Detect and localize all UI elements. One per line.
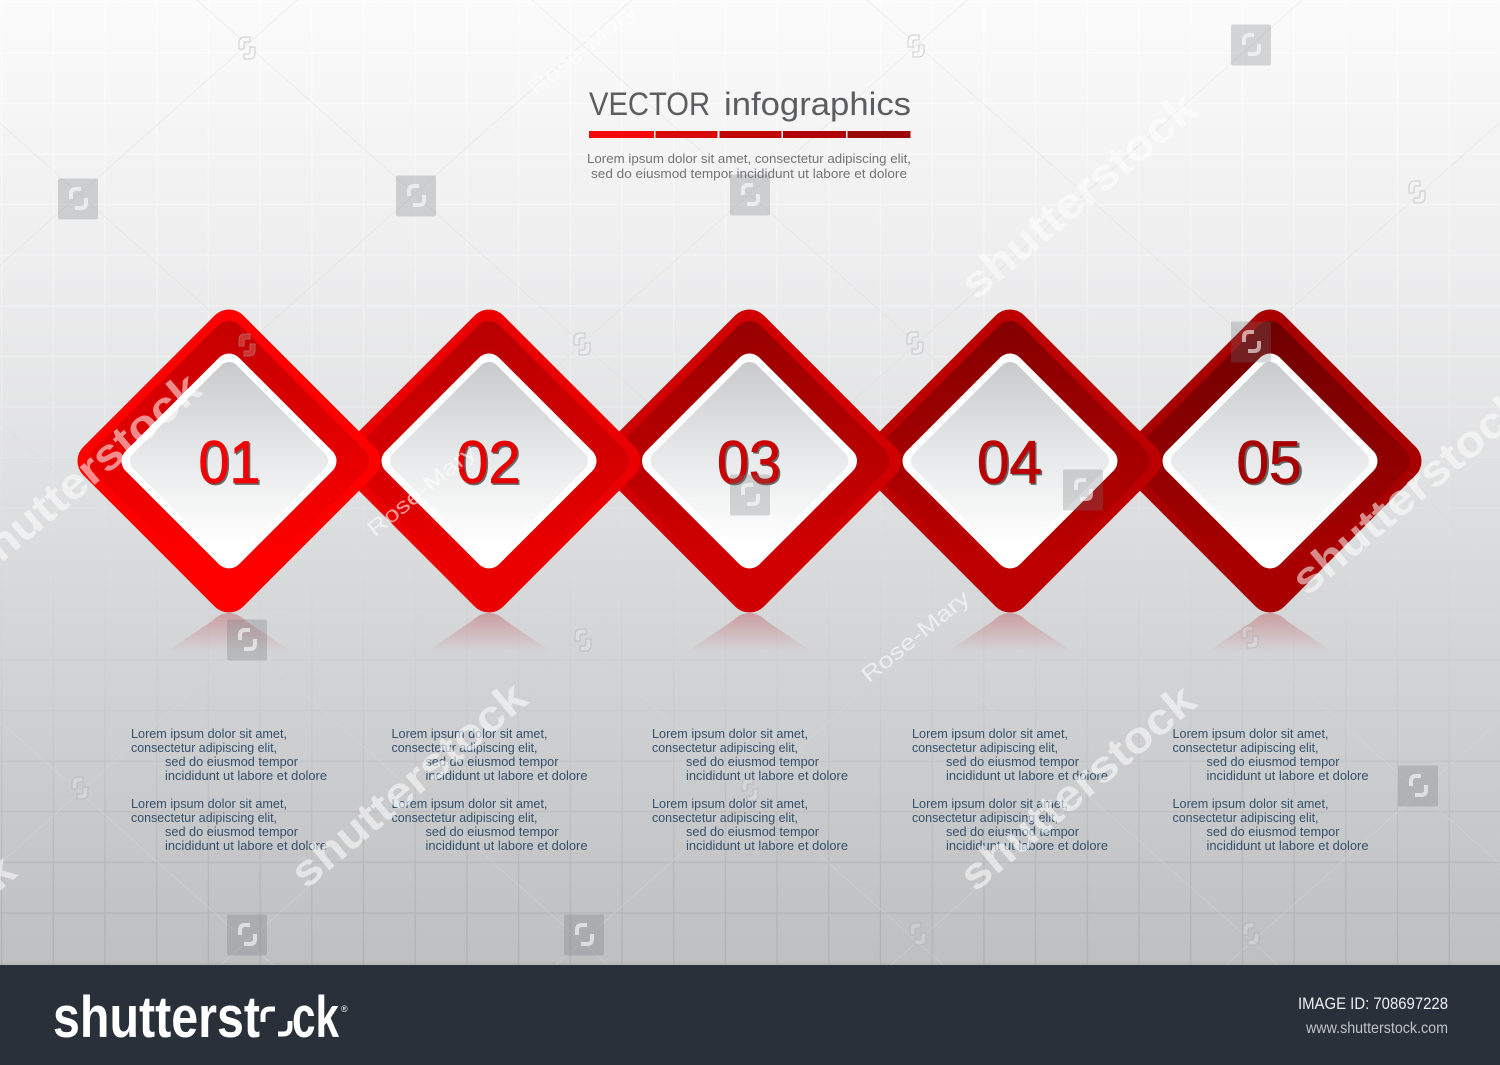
text block: step 05 (1172, 727, 1369, 853)
subtitle (587, 152, 911, 181)
text block: step 03: incididunt ut labore et dolore (686, 769, 848, 783)
watermark text: Rose-Mary (523, 0, 641, 100)
text block: step 05: consectetur adipiscing elit, (1172, 741, 1318, 755)
text block: step 03: Lorem ipsum dolor sit amet, (652, 797, 808, 811)
title (589, 86, 911, 122)
text block: step 01: incididunt ut labore et dolore (165, 839, 327, 853)
text block: step 03: sed do eiusmod tempor (686, 825, 819, 839)
text block: step 03: consectetur adipiscing elit, (652, 741, 798, 755)
text block: step 05: incididunt ut labore et dolore (1206, 769, 1369, 783)
text block: step 01: incididunt ut labore et dolore (165, 769, 327, 783)
text block: step 02: Lorem ipsum dolor sit amet, (392, 797, 548, 811)
text block: step 04: Lorem ipsum dolor sit amet, (912, 727, 1068, 741)
text block: step 03: sed do eiusmod tempor (686, 755, 819, 769)
text block: step 02: incididunt ut labore et dolore (426, 769, 588, 783)
text block: step 04: incididunt ut labore et dolore (946, 769, 1108, 783)
footer logo: ck (292, 985, 340, 1050)
text block: step 05: Lorem ipsum dolor sit amet, (1172, 727, 1328, 741)
text block: step 02: consectetur adipiscing elit, (392, 811, 538, 825)
text block: step 05: Lorem ipsum dolor sit amet, (1172, 797, 1328, 811)
footer bar (0, 965, 1500, 1065)
watermark text: Rose-Mary (856, 585, 974, 687)
step 02 diamond: 02 (458, 430, 522, 498)
title underline: five colour segments (589, 131, 910, 138)
text block: step 01: sed do eiusmod tempor (165, 825, 298, 839)
text block: step 03 (652, 727, 848, 853)
step 02 diamond: 02 (456, 429, 520, 496)
step 04 diamond (858, 309, 1162, 613)
step 05 diamond: 05 (1236, 429, 1302, 496)
watermark text: shutterstock (951, 83, 1207, 309)
text block: step 03: consectetur adipiscing elit, (652, 811, 798, 825)
subtitle: sed do eiusmod tempor incididunt ut labore et dolore (591, 167, 907, 181)
step 01 diamond: 01 (198, 429, 260, 496)
text block: step 05: consectetur adipiscing elit, (1172, 811, 1318, 825)
text block: step 03: incididunt ut labore et dolore (686, 839, 848, 853)
text block: step 02: sed do eiusmod tempor (426, 825, 558, 839)
step 03 diamond (598, 309, 901, 613)
text block: step 01 (131, 727, 327, 853)
text block: step 02: sed do eiusmod tempor (426, 755, 558, 769)
text block: step 01: consectetur adipiscing elit, (131, 741, 277, 755)
step 01 diamond (77, 309, 381, 613)
reflections under diamonds (166, 613, 1333, 652)
step 05 diamond: 05 (1238, 430, 1304, 498)
text block: step 01: consectetur adipiscing elit, (131, 811, 277, 825)
footer image id: IMAGE ID: 708697228 (1298, 994, 1448, 1013)
text block: step 04: consectetur adipiscing elit, (912, 811, 1058, 825)
watermark text: shutterstock (950, 675, 1206, 901)
footer logo: ® (341, 1004, 348, 1014)
text block: step 04 (912, 727, 1108, 853)
step 04 diamond: 04 (977, 429, 1042, 496)
text block: step 01: sed do eiusmod tempor (165, 755, 298, 769)
text block: step 05: sed do eiusmod tempor (1206, 755, 1340, 769)
step 01 diamond: 01 (200, 430, 262, 498)
text block: step 05: sed do eiusmod tempor (1206, 825, 1340, 839)
text block: step 04: sed do eiusmod tempor (946, 755, 1079, 769)
text block: step 03: Lorem ipsum dolor sit amet, (652, 727, 808, 741)
text block: step 04: Lorem ipsum dolor sit amet, (912, 797, 1068, 811)
step 05 diamond (1118, 309, 1422, 613)
watermark text: Rose-Mary (362, 439, 480, 541)
step 04 diamond: 04 (978, 430, 1044, 498)
title: infographics (724, 86, 911, 122)
text block: step 04: incididunt ut labore et dolore (946, 839, 1108, 853)
text block: step 02: consectetur adipiscing elit, (392, 741, 538, 755)
step 03 diamond: 03 (718, 430, 782, 498)
text block: step 02: Lorem ipsum dolor sit amet, (392, 727, 548, 741)
text block: step 01: Lorem ipsum dolor sit amet, (131, 727, 287, 741)
text block: step 02 (392, 727, 588, 853)
text block: step 02: incididunt ut labore et dolore (426, 839, 588, 853)
watermark text: shutterstock (281, 672, 537, 898)
step 02 diamond (337, 309, 641, 613)
title: VECTOR (589, 86, 710, 122)
footer url: www.shutterstock.com (1305, 1020, 1448, 1037)
text block: step 04: sed do eiusmod tempor (946, 825, 1079, 839)
text block: step 01: Lorem ipsum dolor sit amet, (131, 797, 287, 811)
subtitle: Lorem ipsum dolor sit amet, consectetur adipiscing elit, (587, 152, 911, 166)
text block: step 05: incididunt ut labore et dolore (1206, 839, 1369, 853)
text block: step 04: consectetur adipiscing elit, (912, 741, 1058, 755)
step 03 diamond: 03 (717, 429, 781, 496)
footer logo: shutterst (53, 985, 260, 1050)
